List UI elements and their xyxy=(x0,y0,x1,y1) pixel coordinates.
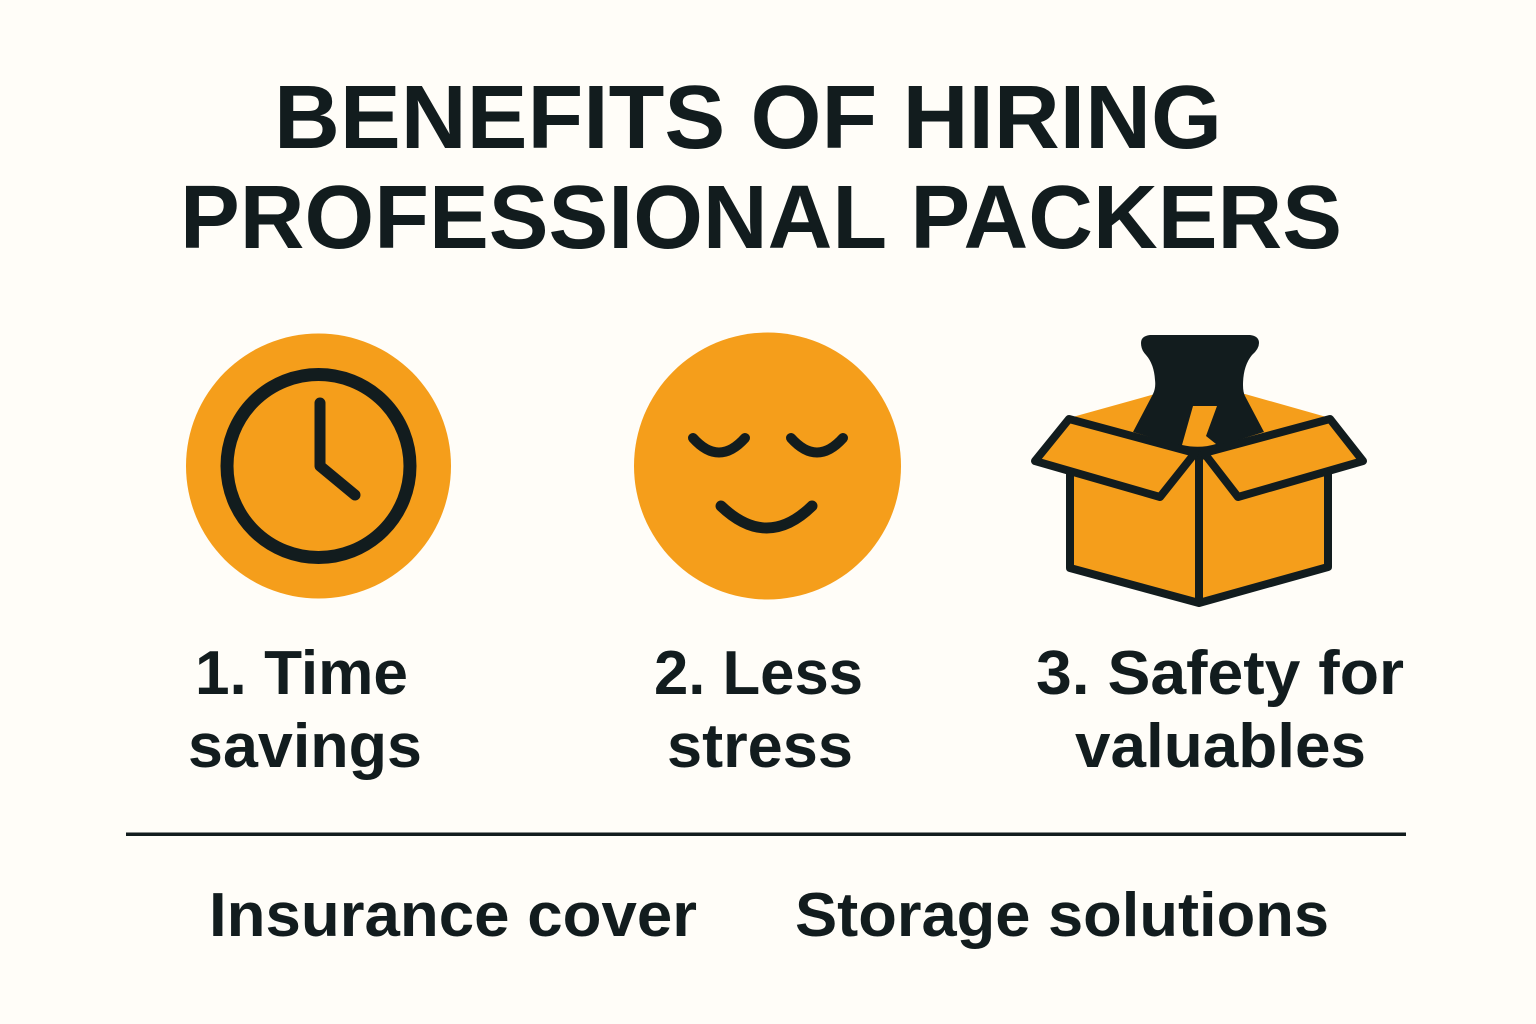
extra benefit: storage solutions: Storage solutions xyxy=(795,881,1329,950)
title xyxy=(180,68,1342,268)
label: safety for valuables xyxy=(1036,639,1404,781)
extra benefit: insurance cover: Insurance cover xyxy=(209,881,697,950)
icon: calm smiling face xyxy=(634,332,901,600)
title: BENEFITS OF HIRING xyxy=(274,68,1222,168)
icon: clock xyxy=(186,334,451,598)
label: time savings xyxy=(188,639,422,781)
label: less stress: 2. Less xyxy=(654,639,863,708)
icon: open box xyxy=(1035,335,1363,603)
label: less stress xyxy=(654,639,863,781)
title: PROFESSIONAL PACKERS xyxy=(180,168,1342,268)
label: safety for valuables: 3. Safety for xyxy=(1036,639,1404,708)
label: time savings: 1. Time xyxy=(195,639,408,708)
label: less stress: stress xyxy=(667,712,853,781)
label: safety for valuables: valuables xyxy=(1075,712,1366,781)
label: time savings: savings xyxy=(188,712,422,781)
